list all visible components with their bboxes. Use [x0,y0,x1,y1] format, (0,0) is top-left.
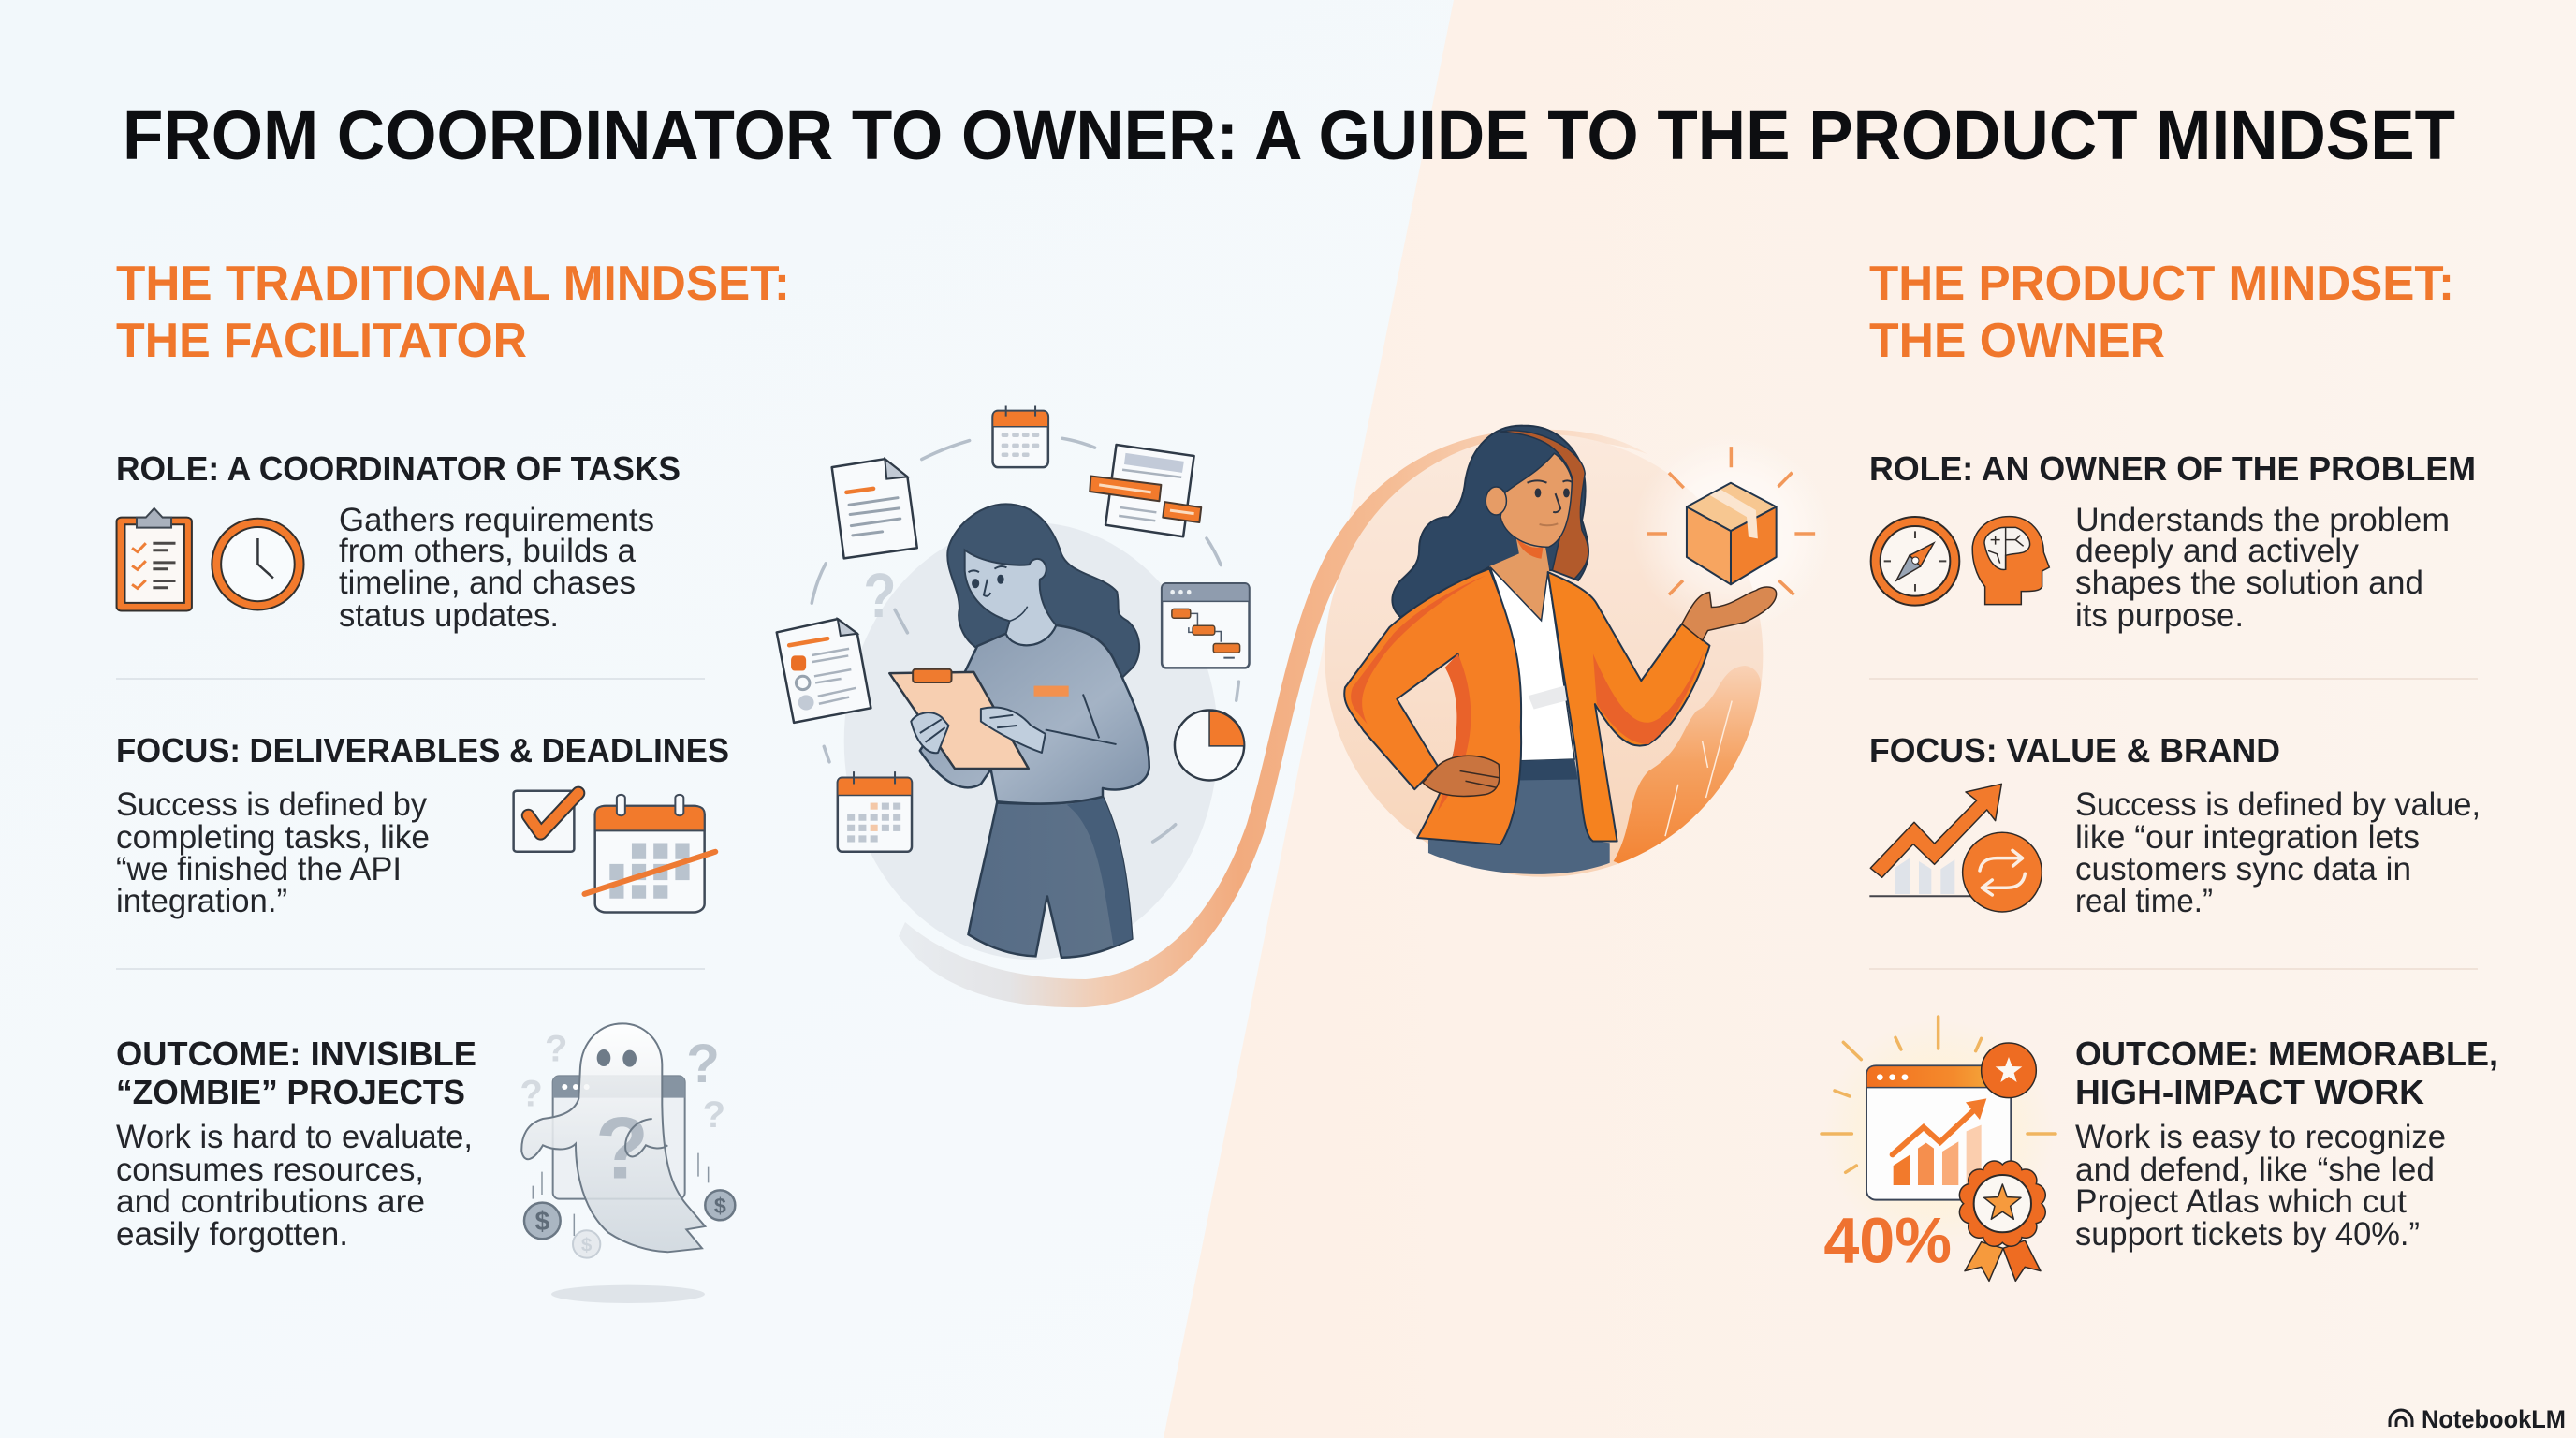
icon: pie chart [1175,710,1244,780]
focus description [2075,786,2481,919]
outcome description: consumes resources, [116,1152,424,1188]
icon: question mark: ? [863,562,896,631]
outcome description [2075,1119,2446,1253]
role description: Understands the problem [2075,502,2450,538]
heading: the traditional mindset [116,257,790,368]
icon: clock [212,519,304,609]
face [1500,453,1572,547]
name badge [1034,686,1069,697]
icon: product box with rays [1647,447,1815,594]
icon: head with brain [1972,517,2049,605]
heading: the product mindset: THE OWNER [1869,314,2165,368]
focus description: real time.” [2075,883,2213,919]
neck and face [965,550,1056,645]
icon: bottom calendar [838,771,912,852]
outcome heading: OUTCOME: MEMORABLE, [2075,1034,2498,1073]
facial features [968,566,1028,621]
icon: ghost with browser window and coins: $ [534,1207,549,1237]
outcome description: Work is easy to recognize [2075,1119,2446,1155]
icon: ghost with browser window and coins: ? [545,1028,567,1069]
shirt [1490,567,1574,761]
right hand [1682,587,1777,640]
role description: timeline, and chases [339,565,636,601]
icon: checklist document [777,619,871,723]
panel: product mindset [1822,257,2498,1281]
role description: status updates. [339,597,559,634]
focus description: completing tasks, like [116,819,430,856]
NotebookLM watermark: NotebookLM [2422,1405,2566,1433]
role heading: ROLE: AN OWNER OF THE PROBLEM [1869,449,2476,488]
icon: clipboard checklist [117,508,192,611]
hair [947,504,1139,678]
role description: from others, builds a [339,533,637,569]
focus description: Success is defined by [116,786,427,823]
role heading: ROLE: A COORDINATOR OF TASKS [116,449,681,488]
pants [968,797,1132,958]
heading: the product mindset [1869,257,2454,368]
hands [911,708,1046,753]
facial features [1528,480,1572,525]
backdrop disc [1325,434,1763,877]
focus description: “we finished the API [116,851,402,888]
pants [1428,759,1610,874]
role description [2075,502,2450,634]
figure: woman in orange blazer [1344,426,1777,874]
icon: growth arrow with sync badge [1869,784,2042,912]
illustration: owner with product box [1325,426,1832,881]
icon: checked box [514,791,578,852]
heading: the traditional mindset: THE TRADITIONAL MINDSET: [116,257,790,311]
focus description: Success is defined by value, [2075,786,2481,823]
icon: compass [1871,517,1959,606]
icon: recognised dashboard with award [1822,1017,2056,1281]
focus heading: FOCUS: DELIVERABLES & DEADLINES [116,731,729,770]
icon: gantt window [1162,583,1250,668]
focus description: like “our integration lets [2075,819,2420,856]
icon: top calendar [993,405,1048,467]
curved connector swoosh [899,430,1647,1007]
outcome description: and defend, like “she led [2075,1152,2435,1188]
outcome heading: HIGH-IMPACT WORK [2075,1073,2424,1111]
icon: document [832,459,917,558]
outcome heading [2075,1034,2498,1111]
title: FROM COORDINATOR TO OWNER: A GUIDE TO THE PRODUCT MINDSET [123,96,2455,174]
outcome description: easily forgotten. [116,1216,348,1253]
icon: ghost with browser window and coins: $ [714,1194,726,1218]
illustration: facilitator surrounded by tasks [777,405,1250,960]
orbit dashes [812,438,1238,842]
role description: its purpose. [2075,597,2244,634]
focus description: customers sync data in [2075,851,2411,888]
outcome heading: OUTCOME: INVISIBLE [116,1034,476,1073]
outcome description [116,1119,473,1253]
icon: recognised dashboard with award: 40% [1823,1205,1952,1276]
role description [339,502,654,634]
outcome heading [116,1034,476,1111]
heading: the product mindset: THE PRODUCT MINDSET: [1869,257,2454,311]
panel: traditional mindset [116,257,790,1303]
icon: gantt document [1090,445,1201,536]
clipboard [889,669,1029,769]
leaf shape [1614,666,1762,881]
outcome description: and contributions are [116,1183,425,1220]
outcome heading: “ZOMBIE” PROJECTS [116,1073,465,1111]
glow behind box [1632,433,1832,634]
icon: ghost with browser window and coins: ? [520,1074,543,1115]
neck [1489,534,1549,621]
left hand [1423,756,1500,796]
sleeve folds [1046,694,1117,744]
backdrop disc [844,522,1218,960]
role description: deeply and actively [2075,533,2359,569]
hair [1392,426,1588,617]
icon: ghost with browser window and coins: ? [686,1034,720,1094]
role description: Gathers requirements [339,502,654,538]
heading: the traditional mindset: THE FACILITATOR [116,314,527,368]
blazer [1344,568,1709,844]
outcome description: support tickets by 40%.” [2075,1216,2420,1253]
figure: woman with clipboard [889,504,1149,958]
focus description: integration.” [116,883,287,919]
focus heading: FOCUS: VALUE & BRAND [1869,731,2280,770]
sweater [920,625,1149,803]
outcome description: Project Atlas which cut [2075,1183,2407,1220]
icon: ghost with browser window and coins: $ [581,1235,593,1256]
icon: ghost with browser window and coins [520,1023,735,1303]
icon: ghost with browser window and coins: ? [703,1094,725,1136]
icon: calendar with crossed deadline [585,795,715,913]
outcome description: Work is hard to evaluate, [116,1119,473,1155]
focus description [116,786,430,919]
role description: shapes the solution and [2075,565,2423,601]
icon: ghost with browser window and coins: ? [595,1099,649,1196]
